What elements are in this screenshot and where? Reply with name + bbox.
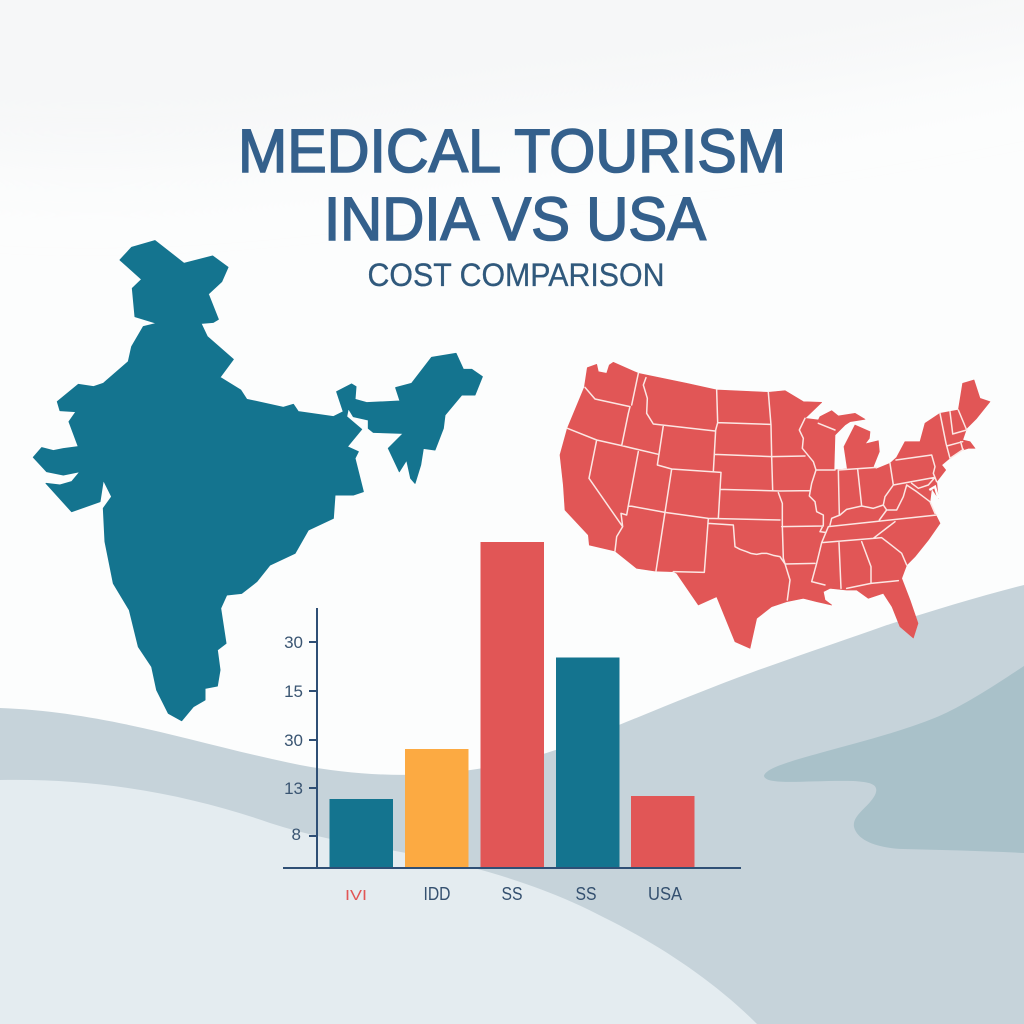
x axis	[283, 867, 741, 869]
bar chart	[283, 542, 741, 904]
bar 2 orange	[405, 749, 468, 868]
y axis labels: 15	[284, 682, 303, 701]
y axis labels: 8	[292, 825, 301, 844]
background: darker right hill	[764, 666, 1024, 853]
x axis labels: IDD	[424, 884, 450, 904]
title line 2: INDIA VS USA	[324, 185, 706, 253]
Chesapeake Bay	[929, 487, 938, 498]
background: soft top band	[0, 0, 1024, 161]
USA state borders	[567, 373, 967, 600]
background: light front hill	[0, 780, 757, 1024]
bar 4 teal	[556, 658, 620, 868]
USA land	[560, 362, 990, 648]
background: right and left mid hill	[0, 585, 1024, 1024]
title line 1: MEDICAL TOURISM	[238, 117, 786, 185]
x axis labels: SS	[576, 884, 596, 904]
map: USA	[560, 362, 990, 648]
bar 3 red	[480, 542, 544, 868]
subtitle: COST COMPARISON	[368, 257, 664, 293]
bar 1 teal	[330, 799, 393, 868]
y axis labels: 30	[284, 633, 303, 652]
y axis labels	[284, 633, 303, 844]
x axis labels: SS	[502, 884, 522, 904]
y axis and ticks	[309, 608, 317, 868]
x axis labels: IVI	[345, 887, 367, 904]
x axis labels: USA	[648, 884, 682, 904]
y axis labels: 30	[284, 731, 303, 750]
x axis labels	[345, 884, 682, 904]
y axis labels: 13	[284, 779, 303, 798]
title	[238, 117, 786, 253]
bar 5 red	[631, 796, 694, 868]
map: India	[33, 241, 482, 721]
